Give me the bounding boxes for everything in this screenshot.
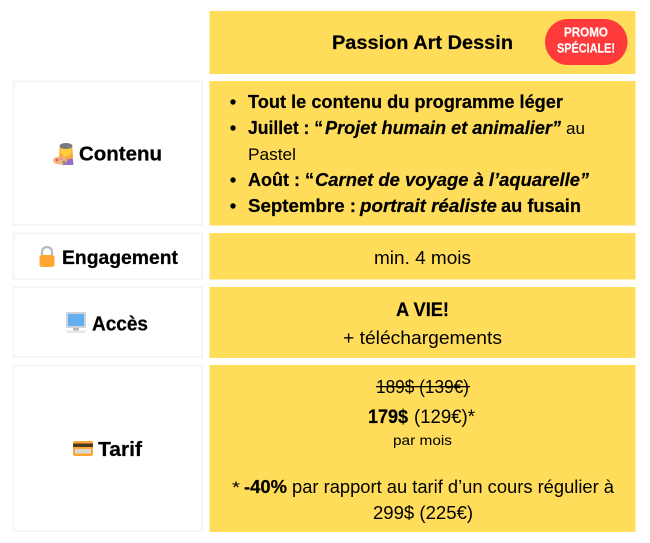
bullet list: Août : “ (248, 170, 314, 190)
bullet list: portrait réaliste (359, 196, 497, 216)
footnote: par rapport au tarif d’un cours régulier à (292, 477, 615, 497)
bullet list: Juillet : “ (248, 118, 323, 138)
row label: Accès (14, 288, 202, 357)
new price: (129€)* (414, 407, 476, 428)
icon: artist emoji (53, 143, 74, 165)
label text: Contenu (79, 144, 162, 166)
panel: contenu details (210, 81, 636, 226)
label text: Tarif (98, 439, 142, 461)
row label: Tarif (14, 366, 202, 531)
bullet list: au fusain (501, 196, 581, 216)
footnote: -40% (244, 477, 287, 497)
bullet list: au (566, 119, 585, 138)
old price struck through: 189$ (139€) (376, 377, 469, 397)
icon: computer (66, 312, 86, 333)
panel: accès value: + téléchargements (343, 328, 502, 348)
bullet list: ” (580, 170, 589, 190)
bullet list: ” (552, 118, 561, 138)
bullet list: Septembre : (248, 196, 356, 216)
icon: lock (40, 247, 54, 267)
per month note: par mois (393, 432, 452, 448)
badge: promo spéciale: SPÉCIALE! (557, 40, 615, 56)
new price: 179$ (368, 407, 408, 428)
label text: Accès (92, 314, 148, 336)
bullet list (230, 92, 589, 216)
new price (368, 407, 476, 428)
icon: credit card (73, 441, 93, 456)
row label: Contenu (14, 82, 202, 225)
panel: accès value (210, 287, 636, 358)
bullet list: Projet humain et animalier (325, 118, 553, 138)
badge: promo spéciale (545, 19, 628, 65)
bullet list: Pastel (248, 145, 296, 164)
footnote: 299$ (225€) (373, 503, 473, 523)
panel: engagement value: min. 4 mois (374, 248, 471, 268)
label text: Engagement (62, 248, 179, 269)
footnote (232, 477, 615, 523)
panel: tarif details (210, 365, 636, 532)
header panel: Passion Art Dessin (210, 11, 636, 74)
row label: Engagement (14, 234, 202, 279)
badge: promo spéciale: PROMO (564, 24, 608, 40)
bullet list: Carnet de voyage à l’aquarelle (315, 170, 580, 190)
bullet list: Tout le contenu du programme léger (248, 92, 563, 112)
footnote: * (232, 478, 240, 497)
panel: accès value: A VIE! (396, 300, 449, 321)
panel: engagement value (210, 233, 636, 280)
heading: program name: Passion Art Dessin (332, 33, 513, 54)
